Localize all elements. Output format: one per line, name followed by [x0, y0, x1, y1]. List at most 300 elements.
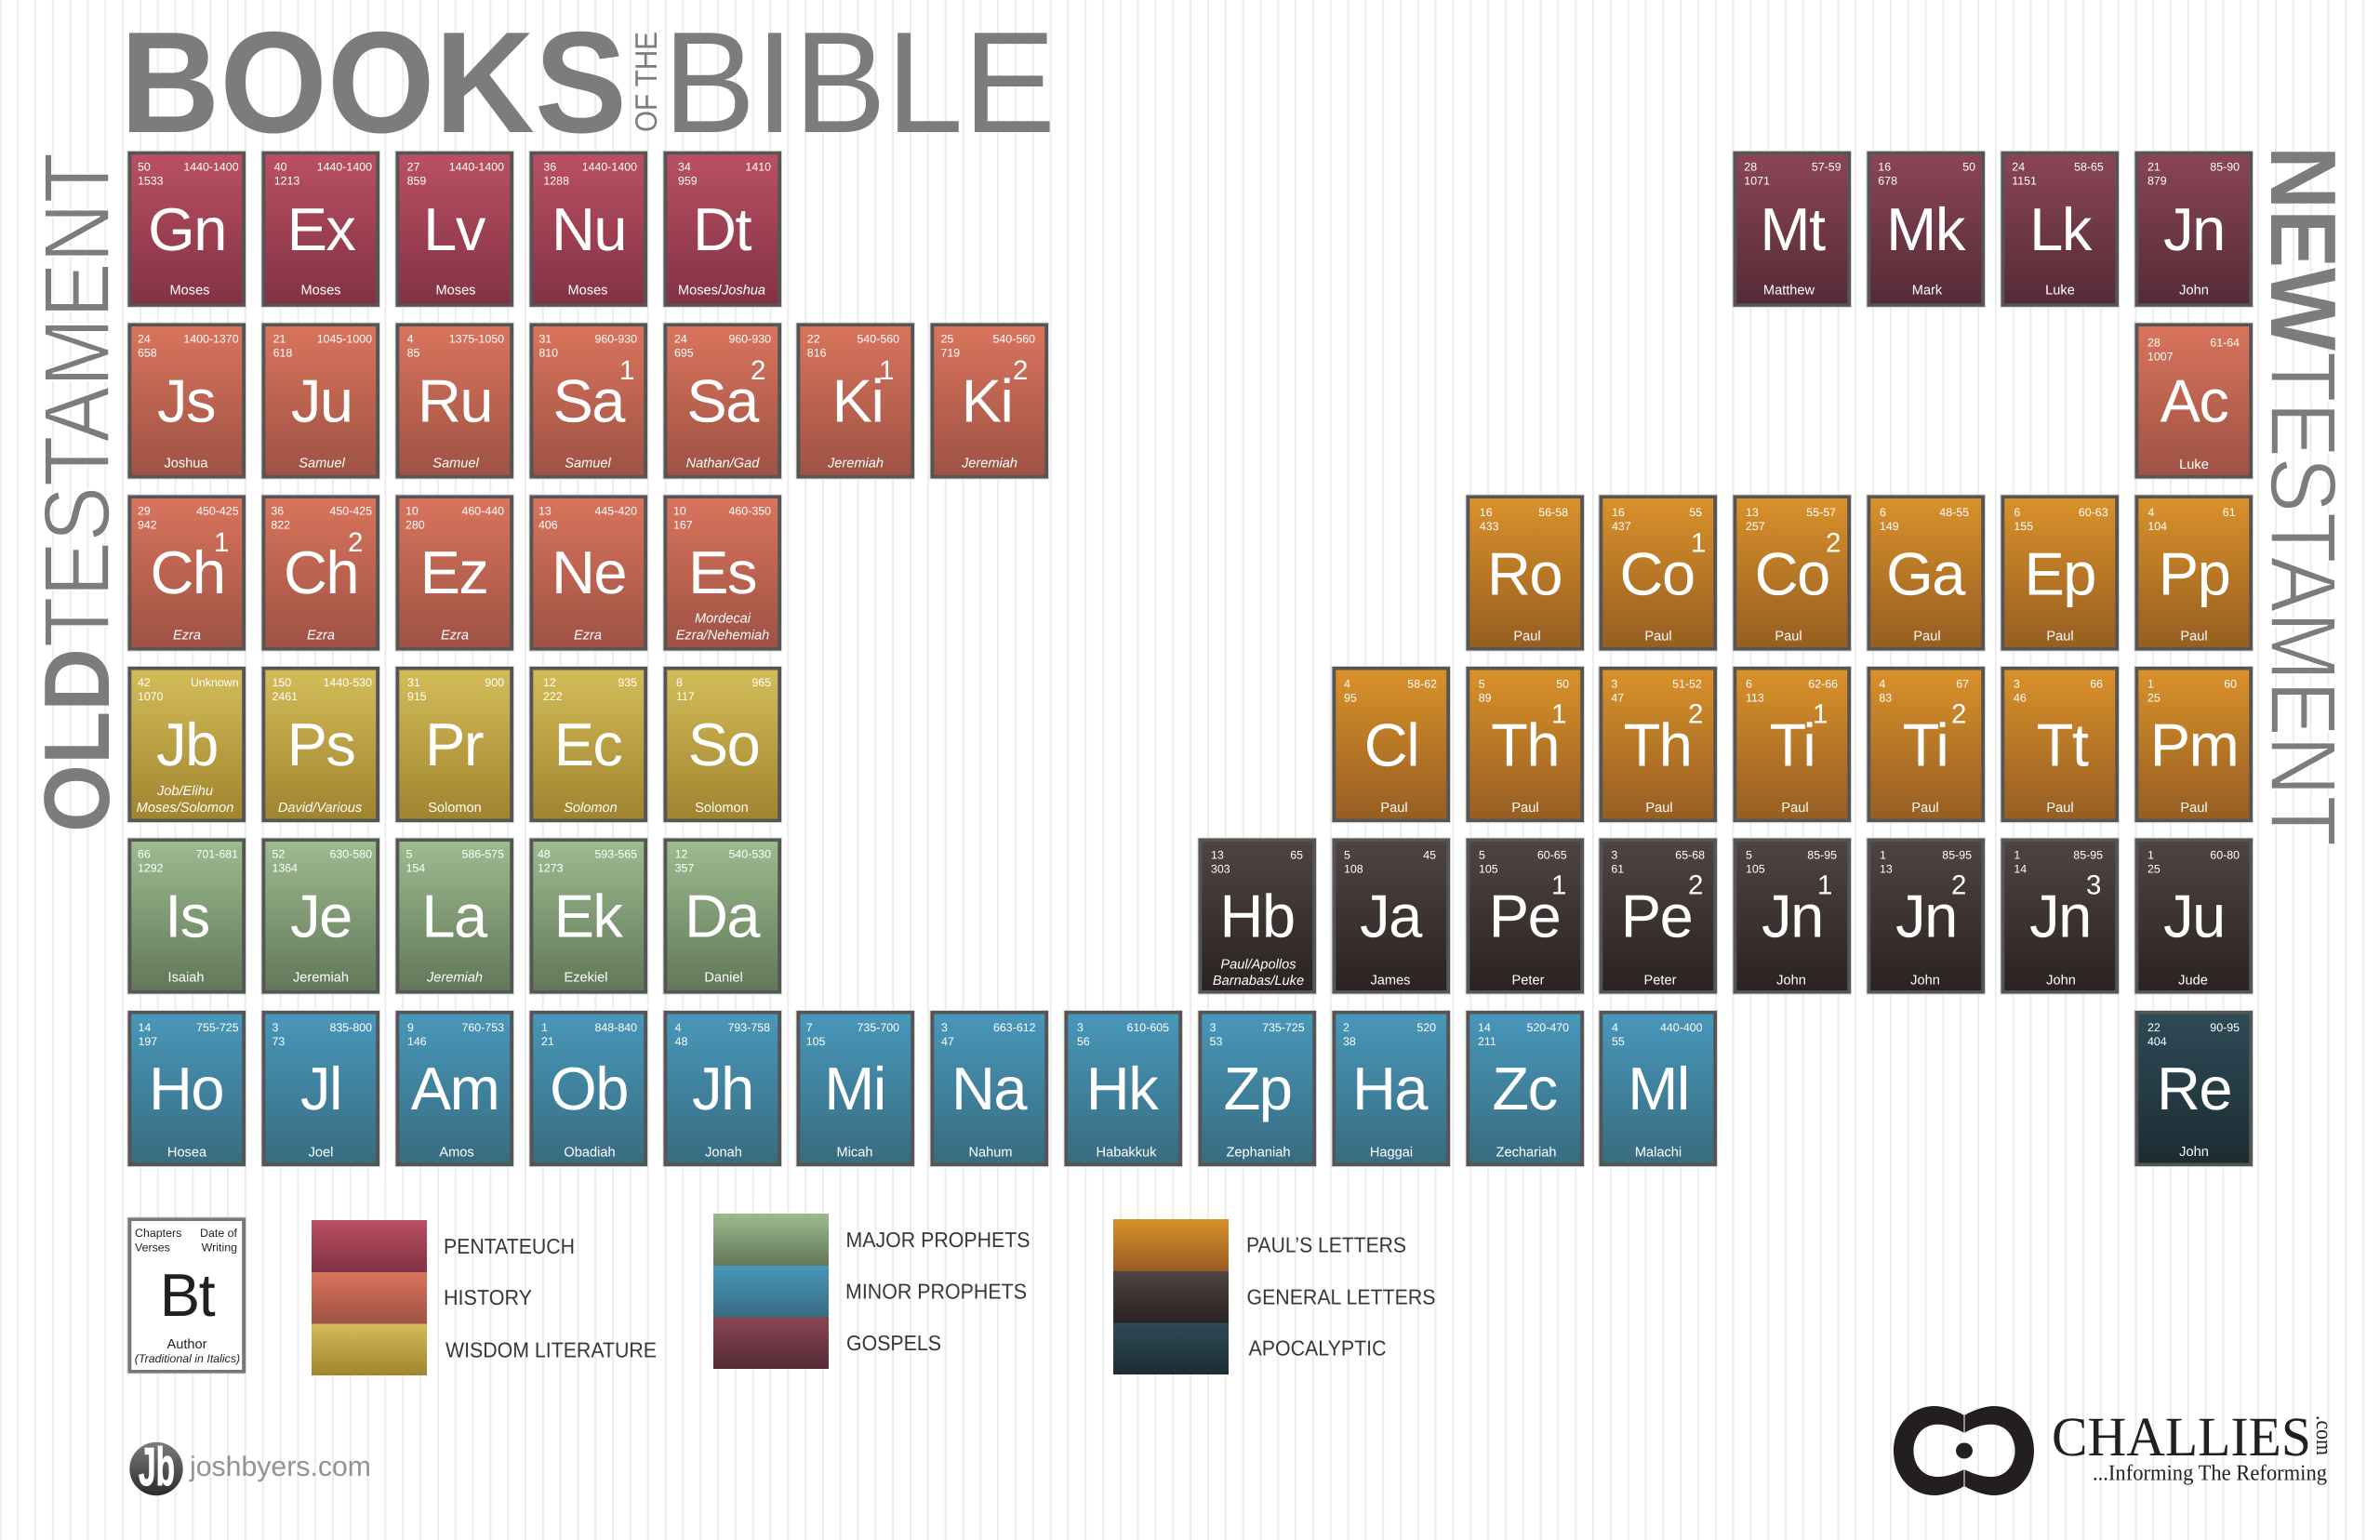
- tile: Ju: 1045-1000: [317, 332, 372, 345]
- tile: Mi: 105: [806, 1035, 825, 1048]
- tile: Ga: [1867, 495, 1985, 651]
- tile: Dt: 1410: [745, 161, 771, 174]
- tile: 2 Sa: Nathan/Gad: [686, 456, 760, 471]
- tile: Lk: [2001, 151, 2119, 307]
- tile: 2 Th: 51-52: [1672, 677, 1702, 690]
- tile: 1 Ti: [1733, 666, 1851, 822]
- tile: Cl: 4: [1344, 677, 1350, 690]
- tile: Ep: Paul: [2046, 629, 2074, 644]
- tile: 1 Pe: 105: [1479, 862, 1498, 875]
- legend item: Gospels: [713, 1317, 941, 1369]
- tile: Je: 52: [272, 847, 285, 860]
- side heading: New Testament: NEW: [2251, 146, 2355, 352]
- tile: Am: 9: [407, 1021, 414, 1034]
- tile: Lv: Lv: [423, 195, 486, 263]
- text: CHALLIES: CHALLIES: [2052, 1406, 2311, 1467]
- tile: 2 Ki: Ki: [962, 367, 1012, 435]
- tile: Zp: Zp: [1224, 1055, 1291, 1122]
- tile: Ju: 618: [273, 346, 292, 359]
- tile: 2 Ki: 2: [1013, 355, 1028, 386]
- tile: Na: 3: [941, 1021, 948, 1034]
- tile: Zp: 3: [1210, 1021, 1217, 1034]
- tile: 1 Th: 1: [1551, 699, 1566, 729]
- tile: 1 Th: Th: [1491, 711, 1559, 779]
- tile: Ne: 406: [538, 518, 558, 531]
- tile: Da: Daniel: [704, 970, 743, 985]
- tile: 1 Ti: Ti: [1770, 711, 1815, 779]
- tile: Hb: 65: [1290, 848, 1303, 861]
- tile: Ho: Ho: [149, 1055, 223, 1122]
- tile: Ec: Ec: [554, 710, 621, 778]
- tile: Ek: Ezekiel: [564, 970, 608, 985]
- tile: Mt: Matthew: [1763, 284, 1815, 299]
- tile: Ja: 5: [1344, 848, 1350, 861]
- tile: Na: Na: [951, 1055, 1028, 1122]
- tile: Mk: 678: [1878, 175, 1897, 188]
- tile: 1 Ch: 29: [138, 504, 151, 517]
- tile: 1 Co: Co: [1620, 540, 1695, 608]
- tile: Mi: 735-700: [858, 1021, 899, 1034]
- tile: 1 Ki: 22: [807, 332, 820, 345]
- tile: 2 Jn: [1867, 838, 1985, 994]
- tile: 2 Ti: 2: [1951, 699, 1966, 729]
- tile: 1 Th: [1466, 666, 1585, 822]
- tile: 2 Ch: 2: [348, 527, 363, 558]
- tile: La: 154: [406, 861, 425, 874]
- tile: Ha: 2: [1343, 1021, 1350, 1034]
- tile: Pr: Pr: [425, 710, 484, 778]
- tile: 1 Ki: 540-560: [858, 332, 899, 345]
- tile: Mi: [796, 1010, 915, 1166]
- tile: 1 Ti: 6: [1746, 677, 1752, 690]
- tile: Ps: 150: [272, 676, 291, 689]
- tile: 1 Sa: Sa: [552, 367, 626, 435]
- tile: Hk: [1064, 1010, 1183, 1166]
- tile: 1 Pe: 1: [1551, 870, 1566, 900]
- tile: 2 Th: Th: [1624, 711, 1691, 779]
- tile: Pm: Pm: [2150, 711, 2238, 779]
- tile: Jh: 48: [675, 1035, 687, 1048]
- tile: Pp: [2134, 495, 2253, 651]
- tile: Cl: 58-62: [1407, 677, 1437, 690]
- legend item: Apocalyptic: APOCALYPTIC: [1248, 1336, 1386, 1361]
- tile: Zc: Zc: [1492, 1055, 1557, 1122]
- tile: Hb: 13: [1211, 848, 1224, 861]
- tile: Lv: 1440-1400: [449, 161, 504, 174]
- tile: Ga: Paul: [1913, 629, 1941, 644]
- tile: Zc: 211: [1478, 1035, 1496, 1048]
- title: [120, 2, 1056, 163]
- tile: Hb: Paul/Apollos: [1220, 957, 1296, 972]
- tile: Ek: 1273: [538, 861, 564, 874]
- tile: 1 Jn: 105: [1746, 862, 1765, 875]
- tile: Ex: Moses: [301, 284, 340, 299]
- tile: Ec: Solomon: [564, 801, 618, 816]
- tile: So: [663, 666, 781, 822]
- tile: Ju (Jude): [2134, 838, 2253, 994]
- tile: Je: Jeremiah: [293, 970, 349, 985]
- tile: Js: Js: [157, 367, 215, 435]
- tile: 2 Pe: [1599, 838, 1717, 994]
- tile: Ep: Ep: [2024, 540, 2095, 608]
- tile: Re (Apocalyptic): Re: [2157, 1055, 2231, 1122]
- tile: 2 Jn: Jn: [1895, 883, 1957, 950]
- side heading: New Testament: [2251, 146, 2355, 846]
- tile: Pr: 31: [407, 676, 420, 689]
- panel: Major prophets tiles: [127, 838, 781, 994]
- tile: 1 Ch: Ezra: [173, 628, 201, 643]
- tile: Re (Apocalyptic): 404: [2147, 1035, 2167, 1048]
- tile: 3 Jn: John: [2046, 973, 2076, 988]
- tile: 2 Ti: Ti: [1903, 711, 1948, 779]
- side heading: Old Testament: [25, 153, 129, 832]
- tile: Ho: 197: [138, 1035, 157, 1048]
- tile: Pr: [395, 666, 513, 822]
- tile: Mt: Mt: [1760, 195, 1826, 263]
- logo: Challies.com: [1894, 1406, 2335, 1495]
- tile: 1 Ti: Paul: [1781, 801, 1809, 816]
- tile: 1 Ki: 1: [879, 355, 894, 386]
- tile: Cl: Cl: [1364, 711, 1418, 779]
- tile: 1 Pe: Pe: [1489, 883, 1560, 950]
- tile: Tt: Tt: [2037, 711, 2089, 779]
- tile: 1 Pe: Peter: [1512, 973, 1545, 988]
- legend group: prophets and gospels: [713, 1214, 1030, 1369]
- legend group: Old Testament law, history, wisdom: [312, 1220, 657, 1375]
- tile: 2 Ch: Ch: [284, 538, 358, 606]
- tile: Hb: 303: [1211, 862, 1230, 875]
- tile: 1 Co: [1599, 495, 1717, 651]
- tile: Ek: [529, 838, 647, 994]
- tile: Es: 460-350: [729, 504, 771, 517]
- tile: Ne: Ezra: [574, 628, 602, 643]
- tile: Na: Nahum: [968, 1145, 1013, 1160]
- legend key tile: Bt: [160, 1261, 216, 1329]
- legend item: Pentateuch: [312, 1220, 575, 1272]
- tile: 1 Co: Paul: [1644, 629, 1672, 644]
- tile: Mk: Mk: [1886, 195, 1966, 263]
- legend key tile: Writing: [202, 1241, 237, 1255]
- tile: Ac: 61-64: [2210, 336, 2240, 349]
- tile: Je: 1364: [272, 861, 298, 874]
- tile: 1 Sa: 1: [619, 355, 634, 386]
- legend item: Major Prophets: MAJOR PROPHETS: [846, 1228, 1030, 1252]
- tile: Hk: Hk: [1086, 1055, 1159, 1122]
- tile: 1 Sa: 31: [538, 332, 552, 345]
- tile: Mk: 16: [1878, 161, 1891, 174]
- tile: La: Jeremiah: [426, 970, 483, 985]
- tile: 1 Jn: 5: [1746, 848, 1752, 861]
- tile: Am: Am: [411, 1055, 499, 1122]
- tile: Hb: Hb: [1220, 883, 1295, 950]
- tile: Da: [663, 838, 781, 994]
- tile: Jb: 42: [138, 676, 151, 689]
- tile: Ju: [261, 323, 379, 479]
- legend key tile: (Traditional in Italics): [135, 1352, 240, 1365]
- tile: 2 Ch: Ezra: [307, 628, 335, 643]
- legend item: Gospels: GOSPELS: [846, 1331, 941, 1355]
- tile: Hb: Barnabas/Luke: [1213, 974, 1304, 989]
- side heading: Old Testament: OLD: [25, 648, 129, 832]
- tile: Jn (Gospel): 85-90: [2210, 161, 2240, 174]
- tile: 2 Jn: 2: [1951, 870, 1966, 900]
- tile: 2 Sa: 2: [751, 355, 765, 386]
- tile: So: 8: [676, 676, 683, 689]
- tile: 3 Jn: Jn: [2029, 883, 2091, 950]
- tile: Hk: 610-605: [1127, 1021, 1169, 1034]
- legend key tile: Author: [167, 1337, 207, 1352]
- side heading: Old Testament: TESTAMENT: [25, 153, 129, 647]
- tile: 2 Co: Paul: [1775, 629, 1802, 644]
- tile: 1 Th: 5: [1479, 677, 1485, 690]
- tile: Re (Apocalyptic): 90-95: [2210, 1021, 2240, 1034]
- tile: Ro: Ro: [1487, 540, 1562, 608]
- tile: Da: 12: [675, 847, 687, 860]
- tile: La: 586-575: [462, 847, 504, 860]
- tile: Ez: 280: [406, 518, 425, 531]
- tile: Mk: 50: [1962, 161, 1975, 174]
- tile: Jl: 3: [272, 1021, 279, 1034]
- tile: Dt: Moses/Joshua: [678, 284, 765, 299]
- tile: 1 Co: 55: [1689, 506, 1702, 519]
- tile: Ml: [1599, 1010, 1717, 1166]
- tile: Nu: 1288: [543, 175, 569, 188]
- tile: Ga: 149: [1880, 520, 1899, 533]
- tile: Ep: 155: [2014, 520, 2033, 533]
- tile: Ml: 4: [1612, 1021, 1618, 1034]
- legend key tile: Date of: [200, 1227, 238, 1240]
- tile: 2 Ki: 25: [941, 332, 953, 345]
- tile: 2 Co: Co: [1755, 540, 1829, 608]
- tile: Ac: Ac: [2161, 367, 2227, 435]
- tile: Ru: [395, 323, 513, 479]
- tile: Jb: Moses/Solomon: [137, 801, 233, 816]
- text: joshbyers.com: joshbyers.com: [189, 1452, 371, 1482]
- tile: Ho: 755-725: [196, 1021, 239, 1034]
- tile: Ne: 13: [538, 504, 552, 517]
- tile: Ps: David/Various: [278, 801, 362, 816]
- tile: Js: 658: [138, 346, 157, 359]
- tile: 1 Sa: 810: [538, 346, 558, 359]
- text: tagline: ...Informing The Reforming: [2093, 1462, 2327, 1486]
- tile: 2 Ti: 4: [1879, 677, 1885, 690]
- tile: Ja: 108: [1344, 862, 1363, 875]
- tile: Ru: Ru: [418, 367, 492, 435]
- tile: 1 Jn: John: [1776, 973, 1806, 988]
- tile: Nu: [529, 151, 647, 307]
- tile: 2 Ch: 36: [271, 504, 284, 517]
- tile: 2 Pe: Pe: [1621, 883, 1692, 950]
- tile: Zc: 14: [1478, 1021, 1491, 1034]
- tile: 2 Ki: 719: [941, 346, 960, 359]
- tile: Lv: [395, 151, 513, 307]
- tile: Ob: Obadiah: [564, 1145, 616, 1160]
- tile: 2 Ti: 83: [1879, 691, 1892, 704]
- tile: Ju (Jude): Ju: [2163, 883, 2225, 950]
- tile: 1 Co: 16: [1612, 506, 1625, 519]
- tile: 2 Jn: 85-95: [1942, 848, 1972, 861]
- tile: Re (Apocalyptic): 22: [2147, 1021, 2161, 1034]
- tile: 2 Ki: Jeremiah: [961, 456, 1017, 471]
- tile: Ju (Jude): 1: [2147, 848, 2154, 861]
- tile: Jb: Jb: [156, 710, 218, 778]
- tile: Am: [395, 1010, 513, 1166]
- tile: Ex: 1213: [274, 175, 299, 188]
- tile: Cl: 95: [1344, 691, 1357, 704]
- tile: Pp: 61: [2223, 506, 2236, 519]
- legend item: Paul's Letters: [1113, 1219, 1406, 1271]
- tile: Gn: [127, 151, 246, 307]
- tile: Mt: 28: [1744, 161, 1757, 174]
- tile: 2 Th: 3: [1611, 677, 1617, 690]
- tile: Jb: Unknown: [191, 676, 239, 689]
- legend key tile: [127, 1217, 246, 1374]
- tile: Dt: 959: [678, 175, 698, 188]
- tile: Ez: Ezra: [441, 628, 469, 643]
- tile: Gn: 1533: [138, 175, 164, 188]
- tile: Pp: Paul: [2180, 629, 2208, 644]
- tile: Cl: [1332, 666, 1451, 822]
- tile: Ro: 56-58: [1538, 506, 1568, 519]
- tile: Ga: 48-55: [1939, 506, 1969, 519]
- logo: joshbyers.com: [129, 1437, 371, 1497]
- panel: General letters tiles: [1198, 838, 2253, 994]
- tile: Ep: 6: [2014, 506, 2020, 519]
- legend item: Paul's Letters: PAUL’S LETTERS: [1246, 1233, 1406, 1257]
- tile: 1 Ki: Jeremiah: [827, 456, 884, 471]
- tile: Jl: Joel: [309, 1145, 333, 1160]
- tile: Mt: [1733, 151, 1851, 307]
- tile: Es: [663, 495, 781, 651]
- tile: 1 Jn: Jn: [1762, 883, 1823, 950]
- tile: 2 Ki: 540-560: [993, 332, 1035, 345]
- tile: Jn (Gospel): John: [2179, 284, 2209, 299]
- tile: 2 Ti: 67: [1956, 677, 1969, 690]
- tile: Ez: 10: [406, 504, 419, 517]
- tile: Ec: 222: [543, 690, 563, 703]
- side heading: New Testament: TESTAMENT: [2251, 352, 2355, 846]
- tile: Je: 630-580: [330, 847, 372, 860]
- tile: 1 Ch: 1: [214, 527, 229, 558]
- tile: Ja: James: [1371, 973, 1410, 988]
- panel: Wisdom literature tiles: [127, 666, 781, 822]
- tile: Ho: 14: [138, 1021, 151, 1034]
- tile: Zp: [1198, 1010, 1317, 1166]
- tile: Am: 760-753: [462, 1021, 504, 1034]
- tile: Ez: [395, 495, 513, 651]
- tile: Jh: Jonah: [705, 1145, 742, 1160]
- tile: Jl: Jl: [300, 1055, 341, 1122]
- tile: Mi: Micah: [837, 1145, 872, 1160]
- tile: 1 Ch: 942: [138, 518, 157, 531]
- tile: Zp: 735-725: [1262, 1021, 1305, 1034]
- tile: 3 Jn: 14: [2014, 862, 2027, 875]
- tile: Is: 1292: [138, 861, 164, 874]
- tile: Is: 66: [138, 847, 151, 860]
- tile: 1 Jn: [1733, 838, 1851, 994]
- tile: Jl: 835-800: [330, 1021, 372, 1034]
- tile: Ps: 2461: [272, 690, 298, 703]
- tile: Is: Is: [165, 883, 209, 950]
- tile: Ec: [529, 666, 647, 822]
- tile: Ro: 16: [1480, 506, 1493, 519]
- tile: Ja: Ja: [1360, 883, 1423, 950]
- tile: 2 Pe: 61: [1611, 862, 1624, 875]
- panel: Pentateuch tiles: [127, 151, 781, 307]
- tile: Ju (Jude): Jude: [2178, 973, 2208, 988]
- tile: Je: [261, 838, 379, 994]
- tile: 1 Th: 89: [1479, 691, 1492, 704]
- tile: Pm: 60: [2224, 677, 2237, 690]
- tile: Tt: 46: [2014, 691, 2027, 704]
- tile: Nu: Nu: [552, 195, 626, 263]
- tile: 2 Co: [1733, 495, 1851, 651]
- tile: Ro: Paul: [1513, 629, 1541, 644]
- tile: 1 Jn: 1: [1817, 870, 1832, 900]
- tile: Pp: 104: [2147, 520, 2167, 533]
- tile: Zp: 53: [1210, 1035, 1222, 1048]
- panel: History tiles: [127, 323, 2253, 651]
- tile: 1 Ki: Ki: [832, 367, 883, 435]
- tile: Ro: 433: [1480, 520, 1499, 533]
- tile: 1 Sa: Samuel: [565, 456, 611, 471]
- tile: Is: 701-681: [196, 847, 238, 860]
- tile: Pr: 915: [407, 690, 427, 703]
- tile: So: 117: [676, 690, 695, 703]
- icon: jb circle: Jb: [139, 1437, 175, 1497]
- tile: 1 Ch: 450-425: [196, 504, 239, 517]
- tile: 1 Sa: 960-930: [595, 332, 637, 345]
- tile: La: La: [421, 883, 488, 950]
- tile: Gn: Moses: [170, 284, 209, 299]
- tile: Ek: Ek: [554, 883, 623, 950]
- tile: Pm: 1: [2147, 677, 2154, 690]
- tile: Jh: Jh: [692, 1055, 753, 1122]
- tile: Ex: [261, 151, 379, 307]
- tile: Jl: [261, 1010, 379, 1166]
- tile: Jh: [663, 1010, 781, 1166]
- tile: Ob: Ob: [550, 1055, 628, 1122]
- tile: Ex: 1440-1400: [317, 161, 372, 174]
- tile: 2 Sa: Sa: [686, 367, 760, 435]
- tile: 1 Ch: [127, 495, 246, 651]
- tile: Nu: 1440-1400: [582, 161, 637, 174]
- tile: Zc: Zechariah: [1496, 1145, 1556, 1160]
- tile: Ru: 85: [407, 346, 419, 359]
- tile: Ml: 440-400: [1660, 1021, 1703, 1034]
- tile: Jn (Gospel): 879: [2147, 175, 2167, 188]
- tile: Ac: Luke: [2179, 458, 2209, 472]
- tile: Ml: Malachi: [1635, 1145, 1682, 1160]
- tile: Dt: Dt: [693, 195, 751, 263]
- tile: Es: 10: [673, 504, 686, 517]
- tile: Jh: 793-758: [728, 1021, 770, 1034]
- title word: BIBLE: BIBLE: [663, 2, 1056, 163]
- tile: Ha: Haggai: [1370, 1145, 1413, 1160]
- tile: Js: 24: [138, 332, 151, 345]
- tile: Tt: [2001, 666, 2119, 822]
- legend key tile: Verses: [135, 1241, 170, 1255]
- tile: Re (Apocalyptic): [2134, 1010, 2253, 1166]
- tile: Zp: Zephaniah: [1227, 1145, 1290, 1160]
- tile: 2 Co: 257: [1746, 520, 1765, 533]
- tile: 2 Sa: [663, 323, 781, 479]
- tile: 2 Sa: 960-930: [729, 332, 771, 345]
- tile: Mi: Mi: [824, 1055, 885, 1122]
- tile: Da: 357: [675, 861, 694, 874]
- tile: 2 Ch: 822: [271, 518, 290, 531]
- tile: Mk: [1867, 151, 1985, 307]
